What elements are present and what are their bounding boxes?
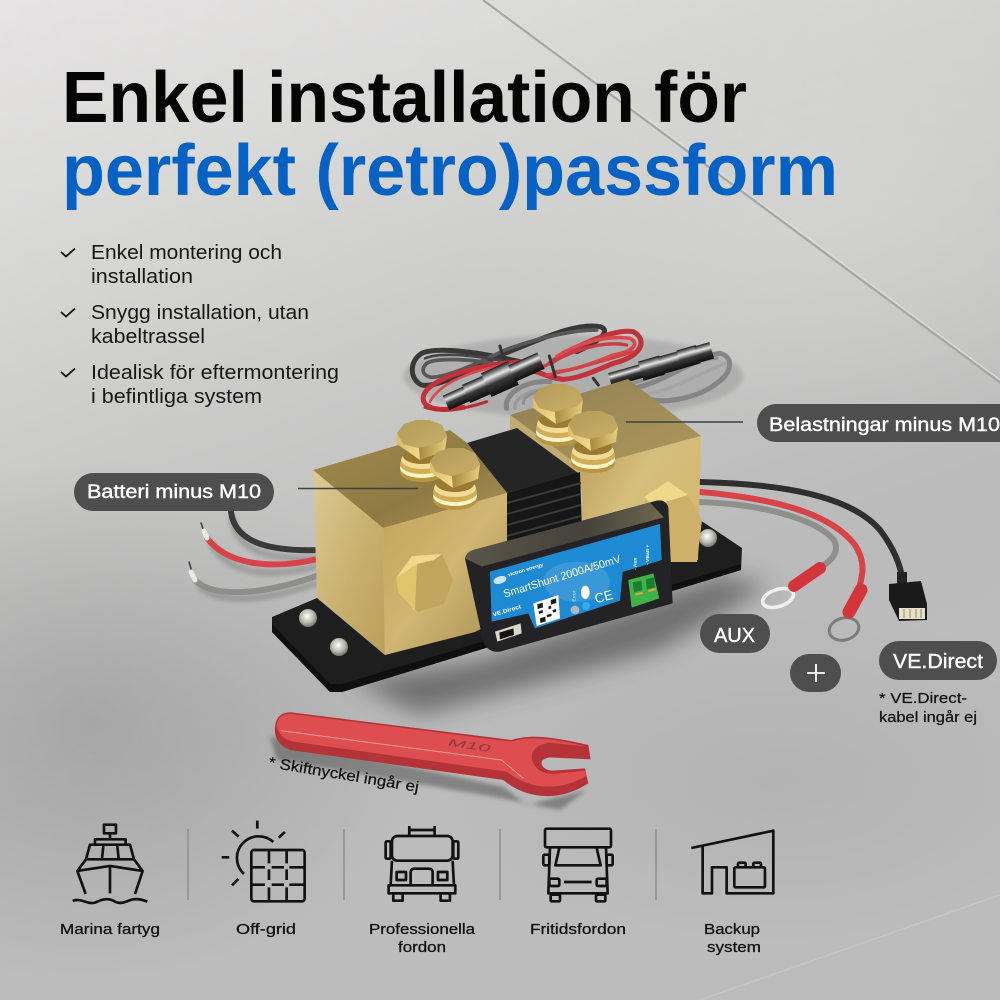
black cable — [231, 512, 322, 550]
note: VE.Direct cable — [879, 690, 977, 726]
grey cable loop — [506, 353, 730, 408]
divider lines — [188, 829, 656, 900]
left cables — [189, 512, 322, 598]
label: Batteri minus M10: Batteri minus M10 — [87, 482, 261, 503]
smartshunt device — [272, 379, 742, 692]
terminal labels: - Aux — [633, 557, 639, 570]
feature checklist — [61, 242, 339, 408]
side bolt right — [644, 481, 702, 562]
application icons row — [60, 821, 773, 956]
product name: SmartShunt 2000A/50mV — [502, 553, 623, 601]
blue label — [490, 524, 662, 628]
back cable bundle — [403, 326, 743, 418]
grey cable — [195, 574, 322, 592]
smartshunt module — [465, 500, 673, 652]
icon: truck — [386, 826, 458, 901]
icon: solar panel — [222, 821, 305, 901]
right brass block — [510, 379, 701, 560]
check item 3: Idealisk för eftermontering — [91, 362, 339, 384]
wave logo — [543, 562, 610, 602]
positive ring terminal — [827, 590, 861, 644]
VE.Direct connector — [889, 572, 927, 621]
wrench highlight — [281, 731, 523, 778]
label: Backup system — [704, 921, 761, 956]
wrench face — [277, 714, 587, 787]
label: Fritidsfordon: Fritidsfordon — [530, 921, 626, 938]
wrench shadow — [270, 737, 587, 810]
base plate screws — [299, 529, 717, 656]
vbatt label: - VBatt + — [645, 545, 651, 565]
dark cable loop — [412, 326, 605, 385]
red cable — [207, 538, 322, 564]
wrench size mark: M10 — [447, 737, 492, 755]
label: Marina fartyg: Marina fartyg — [60, 921, 160, 938]
note: VE.Direct cable: kabel ingår ej — [879, 709, 977, 726]
red cable — [700, 492, 862, 592]
label: Professionella fordon: Professionella — [369, 921, 476, 938]
note: wrench: * Skiftnyckel ingår ej — [267, 754, 420, 796]
check item 1: Enkel montering och — [91, 242, 282, 264]
fuse holder left — [441, 349, 546, 415]
check item 1 — [61, 242, 282, 288]
label: Belastningar minus M10 — [757, 404, 1000, 442]
wire tips — [189, 523, 206, 578]
fuse holder right — [607, 341, 715, 390]
icon: garage with battery — [691, 831, 773, 893]
nuts left block — [397, 420, 480, 510]
label: Professionella fordon: fordon — [398, 939, 446, 956]
aux ring terminal — [760, 568, 820, 611]
right cables — [700, 482, 902, 592]
title — [62, 58, 838, 211]
VE.Direct port — [495, 623, 522, 642]
pointer line load — [626, 421, 743, 423]
red cable loop — [423, 331, 641, 410]
black cable — [700, 482, 902, 577]
error led — [571, 606, 579, 614]
cable ties — [500, 346, 598, 385]
base plate — [272, 520, 742, 692]
label: Backup system: system — [707, 939, 761, 956]
module dusty top — [465, 503, 664, 567]
label: AUX: AUX — [714, 625, 755, 647]
nuts right block — [533, 384, 618, 473]
brand icon — [493, 575, 507, 585]
status labels: Error — [572, 590, 578, 602]
label: Backup system: Backup — [704, 921, 760, 938]
title line 1: Enkel installation för — [62, 58, 747, 138]
label: Professionella fordon — [369, 921, 476, 956]
check item 2: Snygg installation, utan — [91, 302, 309, 324]
check item 1: installation — [91, 266, 193, 288]
label: Off-grid: Off-grid — [236, 921, 296, 938]
bluetooth led — [582, 602, 590, 610]
CE mark: CE — [593, 587, 615, 606]
product shadow — [350, 575, 770, 715]
module body — [465, 500, 673, 652]
check item 2: kabeltrassel — [91, 326, 205, 348]
wrench — [270, 712, 591, 810]
check item 3: i befintliga system — [91, 386, 262, 408]
qr code — [533, 595, 560, 626]
green connector — [628, 573, 659, 608]
label: VE.Direct: VE.Direct — [893, 651, 983, 673]
pointer line battery — [298, 488, 418, 490]
check item 2 — [61, 302, 309, 348]
left brass block — [313, 430, 507, 655]
label: Batteri minus M10 — [74, 473, 274, 511]
grey cable — [700, 502, 836, 568]
VE.Direct label: VE.Direct — [492, 604, 522, 619]
title line 2: perfekt (retro)passform — [62, 131, 838, 211]
side bolt left — [396, 554, 453, 612]
label: VE.Direct — [879, 641, 997, 680]
note: VE.Direct cable: * VE.Direct- — [879, 690, 967, 707]
label: Belastningar minus M10: Belastningar minus M10 — [769, 415, 1000, 436]
check item 3 — [61, 362, 339, 408]
label: plus — [790, 654, 841, 692]
brand name: victron energy — [507, 562, 544, 579]
wrench side — [275, 712, 591, 796]
bluetooth badge — [581, 586, 590, 599]
label: AUX — [700, 614, 770, 653]
icon: ship — [73, 825, 147, 903]
cable shadow — [200, 520, 320, 598]
shunt element — [467, 428, 582, 545]
icon: motorhome — [543, 829, 613, 901]
